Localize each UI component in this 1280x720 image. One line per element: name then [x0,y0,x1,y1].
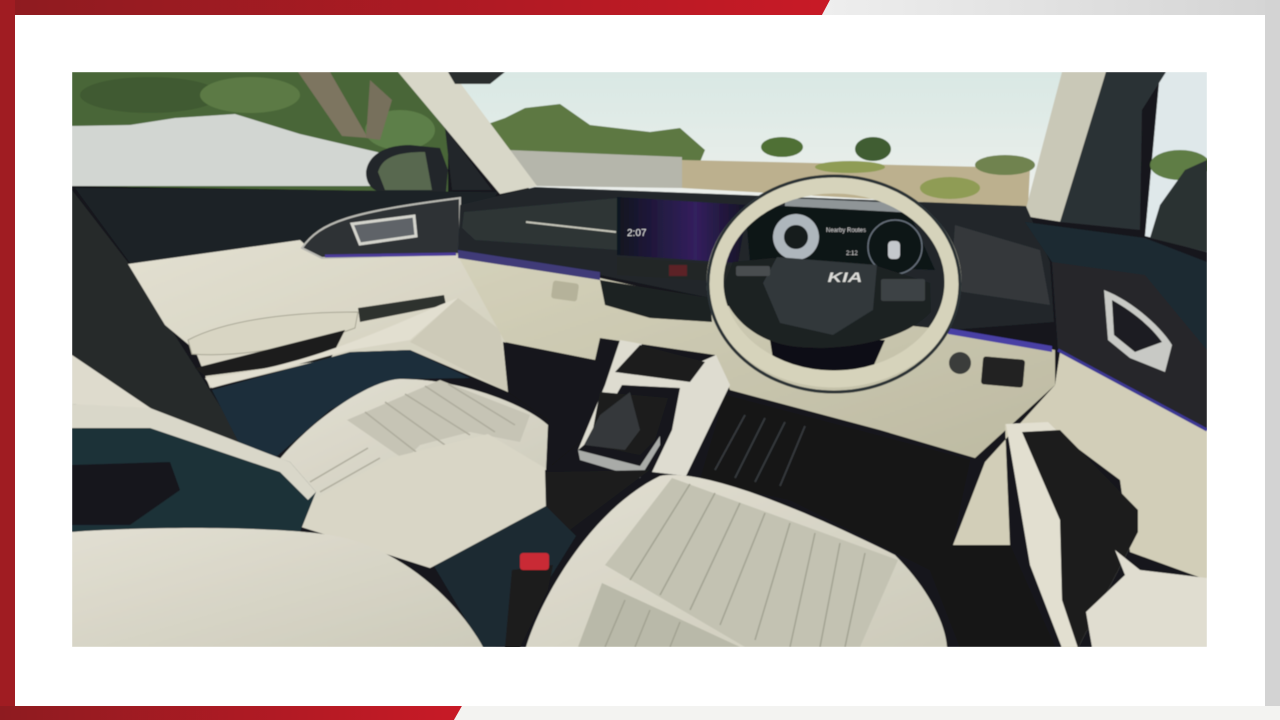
pillar dark triangle [445,128,492,190]
frame: left red bar [0,0,15,720]
frame: bottom red bar [0,706,462,720]
instrument cluster: Nearby Routes [826,228,866,234]
right door armrest [1006,422,1207,648]
left door arm panel [72,404,316,532]
frame: top red bar [0,0,830,15]
A-pillar left [398,72,537,194]
photo: car interior [72,72,1210,648]
frame: top grey bar [822,0,1280,15]
steering wheel [708,176,960,392]
left spoke controls [736,266,770,276]
centre console [546,340,730,492]
footwell right [714,414,806,486]
instrument cluster [745,198,935,274]
front left seat [72,528,483,647]
right curtain [1060,72,1166,230]
frame: bottom light bar [454,706,1280,720]
wheel rim lower thickening [722,310,948,378]
left door [75,188,510,458]
dashboard upper [458,187,1054,330]
frame: right grey bar [1265,0,1280,720]
seat belt buckle [505,553,553,648]
left side window [72,72,448,192]
left seat bolster [72,354,152,409]
wheel rim [715,185,953,379]
wheel outer edge [708,176,960,392]
wheel spokes [722,258,931,348]
left seat cushion [275,379,548,510]
infotainment screen: 2:07 [627,228,647,239]
instrument cluster: 2:12 [846,251,858,257]
left dark pillar [72,190,245,445]
infotainment screen [617,197,748,282]
centre armrest [294,434,546,568]
wing mirror [366,145,448,193]
right spoke controls [881,279,925,301]
front right seat [526,475,947,647]
right pillar [1024,72,1106,222]
steering column [770,340,885,374]
Kia logo: KIA [828,269,862,285]
footwell left [502,342,594,392]
rear-view mirror tip [448,72,505,84]
windshield view [450,72,1065,210]
right window [1145,72,1210,252]
dashboard lower cream [458,250,1055,458]
console storage dark [434,506,576,647]
wheel centre pad [763,257,877,335]
right door [953,222,1207,580]
